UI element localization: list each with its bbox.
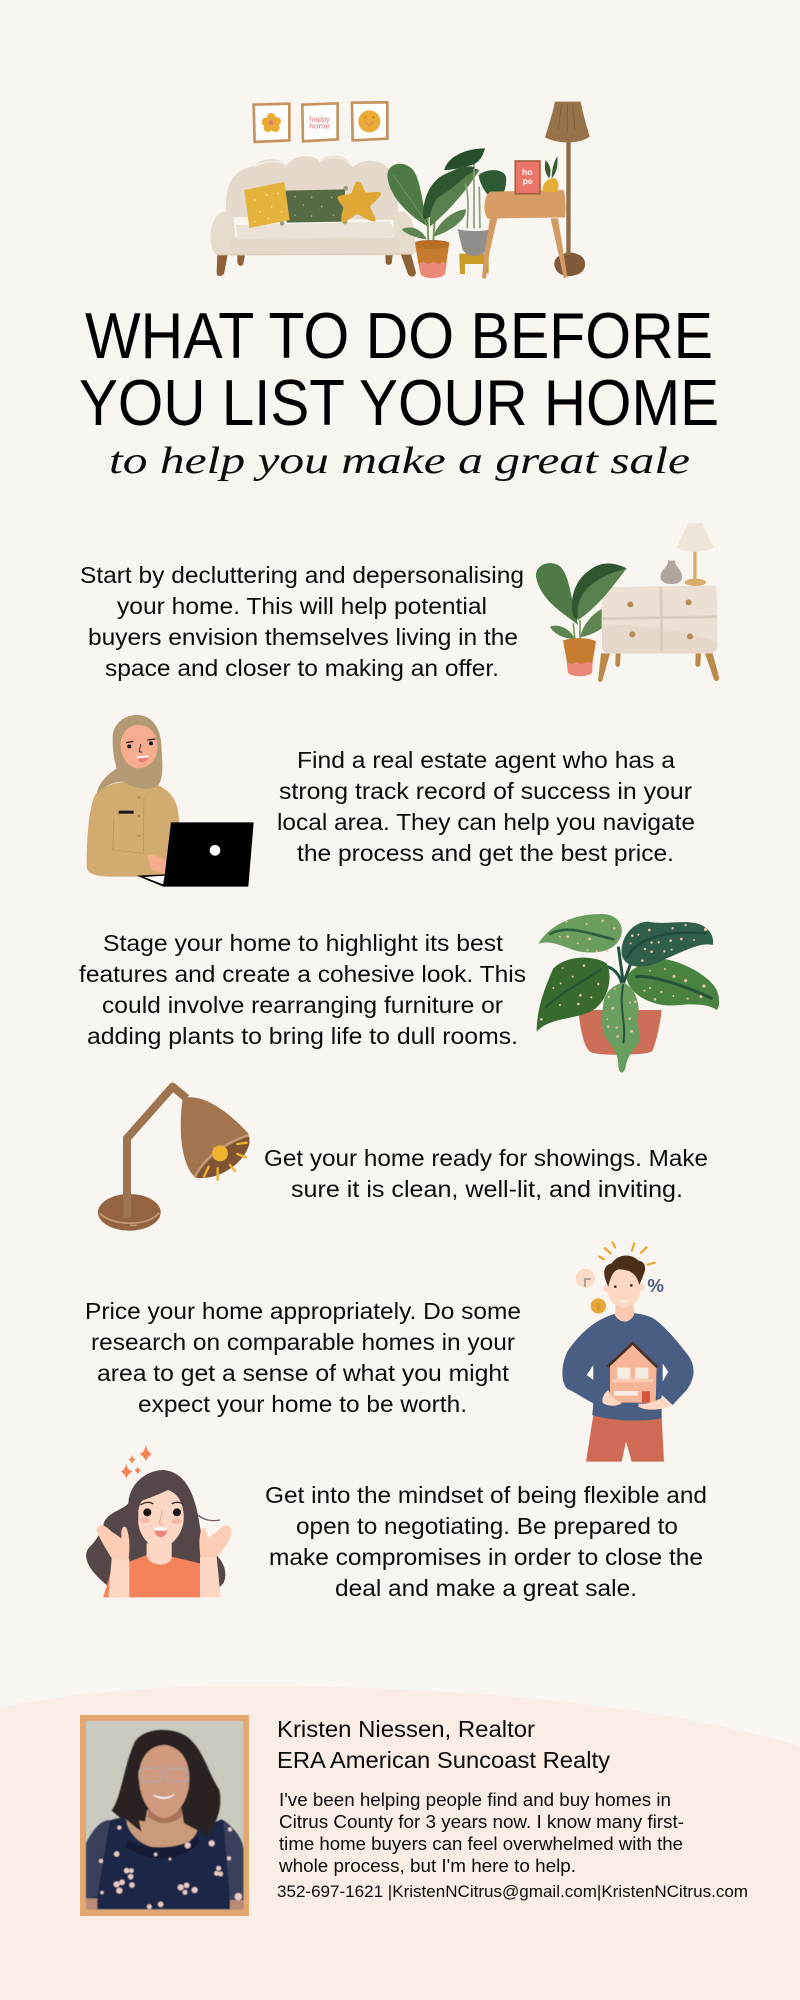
picture frame: flower	[254, 104, 289, 142]
title	[79, 299, 719, 439]
step 3: staging text: could involve rearranging furniture or	[102, 992, 503, 1018]
step 6: flexibility text	[265, 1482, 707, 1601]
step 3: staging text: Stage your home to highlight its best	[103, 930, 504, 956]
step 6: flexibility text: make compromises in order to close the	[269, 1544, 703, 1570]
step 6: flexibility text: open to negotiating. Be prepared to	[296, 1513, 678, 1539]
agent bio: whole process, but I'm here to help.	[278, 1856, 576, 1876]
agent bio: I've been helping people find and buy homes in	[279, 1790, 671, 1810]
illustration: agent with laptop	[87, 715, 254, 887]
step 1: declutter text	[80, 562, 524, 681]
step 6: flexibility text: deal and make a great sale.	[335, 1575, 637, 1601]
subtitle: to help you make a great sale	[109, 440, 690, 482]
side table with hope frame and lamp	[482, 102, 590, 279]
illustration: man holding house model: %	[647, 1275, 664, 1296]
footer band	[0, 1686, 800, 2000]
step 5: pricing text	[85, 1298, 521, 1417]
side table with hope frame and lamp: ho	[522, 167, 533, 177]
illustration: smiling woman with sparkles	[86, 1445, 232, 1597]
illustration: living room with sofa, plants, table and lamp	[211, 102, 590, 279]
agent portrait photo	[80, 1715, 249, 1916]
contact details: 352-697-1621 |KristenNCitrus@gmail.com|KristenNCitrus.com	[277, 1882, 748, 1901]
picture frame: happy home	[302, 103, 338, 141]
step 1: declutter text: buyers envision themselves living in the	[88, 624, 518, 650]
illustration: desk lamp	[98, 1087, 249, 1231]
step 1: declutter text: your home. This will help potential	[117, 593, 487, 619]
sofa cushions	[244, 181, 381, 228]
step 2: agent text: the process and get the best price.	[297, 840, 674, 866]
step 6: flexibility text: Get into the mindset of being flexible and	[265, 1482, 707, 1508]
step 1: declutter text: space and closer to making an offer.	[105, 655, 499, 681]
step 5: pricing text: area to get a sense of what you might	[97, 1360, 510, 1386]
step 1: declutter text: Start by decluttering and depersonalising	[80, 562, 524, 588]
step 2: agent text: local area. They can help you navigate	[277, 809, 695, 835]
picture frame: happy home: home	[309, 124, 330, 131]
step 2: agent text: strong track record of success in your	[279, 778, 692, 804]
step 3: staging text: adding plants to bring life to dull rooms.	[87, 1023, 518, 1049]
agent name and brokerage: ERA American Suncoast Realty	[277, 1747, 611, 1773]
tall plant in grey pot	[433, 148, 506, 274]
illustration: man holding house model: $	[596, 1301, 601, 1311]
illustration: man holding house model	[562, 1242, 694, 1462]
step 2: agent text: Find a real estate agent who has a	[297, 747, 675, 773]
step 4: showings text	[264, 1145, 708, 1202]
step 4: showings text: Get your home ready for showings. Make	[264, 1145, 708, 1171]
side table with hope frame and lamp: pe	[523, 176, 533, 186]
illustration: plant and dresser	[536, 523, 719, 682]
agent name and brokerage	[277, 1716, 611, 1773]
step 5: pricing text: Price your home appropriately. Do some	[85, 1298, 521, 1324]
title: WHAT TO DO BEFORE	[85, 299, 713, 372]
step 2: agent text	[277, 747, 695, 866]
agent name and brokerage: Kristen Niessen, Realtor	[277, 1716, 535, 1742]
step 4: showings text: sure it is clean, well-lit, and inviting.	[291, 1176, 683, 1202]
agent bio	[278, 1790, 684, 1876]
picture frame: smiley sun	[352, 102, 387, 140]
illustration: spotted plant in terracotta pot	[537, 914, 719, 1072]
sofa	[211, 156, 417, 277]
large potted plant	[387, 164, 480, 278]
title: YOU LIST YOUR HOME	[79, 366, 719, 439]
step 3: staging text	[79, 930, 526, 1049]
agent bio: Citrus County for 3 years now. I know many first-	[279, 1812, 684, 1832]
step 5: pricing text: research on comparable homes in your	[91, 1329, 515, 1355]
step 5: pricing text: expect your home to be worth.	[138, 1391, 467, 1417]
agent bio: time home buyers can feel overwhelmed with the	[279, 1834, 683, 1854]
picture frame: happy home: happy	[309, 117, 331, 124]
step 3: staging text: features and create a cohesive look. This	[79, 961, 526, 987]
